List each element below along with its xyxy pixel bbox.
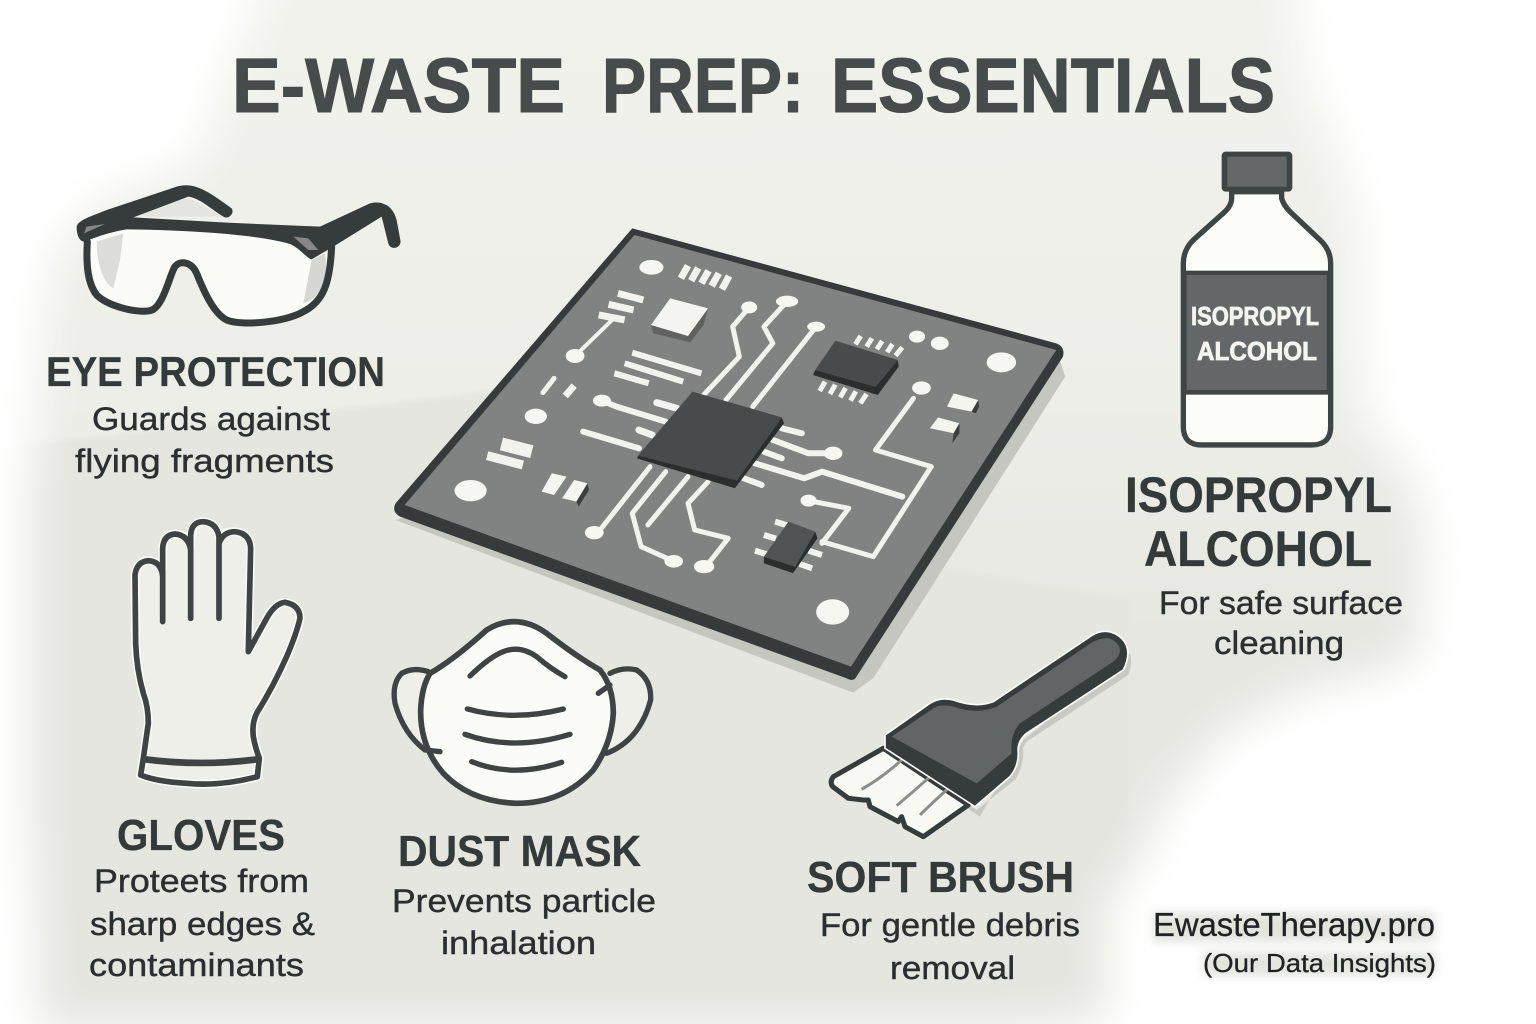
main processor chip [637, 392, 784, 488]
description: soft brush: removal [890, 950, 1015, 986]
description: isopropyl alcohol: cleaning [1214, 625, 1344, 661]
source credit [1153, 906, 1436, 978]
icon: safety glasses [77, 185, 401, 323]
panel: eye protection [46, 185, 401, 479]
icon: dust mask [394, 622, 651, 803]
description: gloves: contaminants [89, 947, 304, 983]
icon: glove [135, 522, 300, 784]
panel: dust mask [392, 622, 656, 961]
lower chip [764, 522, 817, 573]
description: dust mask: inhalation [441, 925, 596, 961]
bottle label text: ISOPROPYL [1191, 301, 1319, 331]
panel: circuit board illustration [394, 228, 1065, 693]
white square component [651, 298, 708, 342]
description: dust mask [392, 883, 656, 961]
description: eye protection [75, 401, 334, 479]
heading: soft brush: SOFT BRUSH [807, 853, 1074, 902]
bottle label text: ALCOHOL [1197, 336, 1317, 366]
description: soft brush: For gentle debris [820, 907, 1080, 943]
bottle label text [1191, 301, 1319, 366]
board surface [405, 235, 1056, 667]
icon: alcohol bottle [1183, 152, 1331, 445]
board outline [394, 228, 1063, 680]
small components [542, 393, 979, 507]
source credit: (Our Data Insights) [1203, 948, 1436, 978]
description: gloves [89, 863, 315, 983]
heading: isopropyl alcohol: ALCOHOL [1144, 521, 1372, 577]
icon: brush [831, 631, 1131, 837]
panel: isopropyl alcohol [1125, 152, 1403, 661]
description: gloves: sharp edges & [90, 906, 315, 942]
title: PREP: [602, 43, 804, 129]
description: gloves: Proteets from [94, 863, 309, 899]
mounting holes and solder pads [455, 260, 1016, 625]
description: isopropyl alcohol [1159, 585, 1403, 661]
panel: soft brush [807, 631, 1131, 986]
title [232, 43, 1275, 129]
title: ESSENTIALS [831, 43, 1275, 129]
heading: eye protection: EYE PROTECTION [46, 348, 385, 395]
panel: gloves [89, 522, 315, 983]
source credit: EwasteTherapy.pro [1153, 906, 1435, 943]
title: E-WASTE [232, 43, 565, 129]
board shadow [396, 357, 1065, 693]
description: dust mask: Prevents particle [392, 883, 656, 919]
heading: dust mask: DUST MASK [398, 827, 641, 876]
description: eye protection: Guards against [92, 401, 330, 437]
heading: isopropyl alcohol [1125, 467, 1392, 577]
heading: isopropyl alcohol: ISOPROPYL [1125, 467, 1392, 523]
circuit traces [487, 266, 931, 568]
description: soft brush [820, 907, 1080, 986]
heading: gloves: GLOVES [117, 811, 285, 860]
description: isopropyl alcohol: For safe surface [1159, 585, 1403, 621]
upper right chip [813, 341, 899, 395]
description: eye protection: flying fragments [75, 443, 334, 479]
